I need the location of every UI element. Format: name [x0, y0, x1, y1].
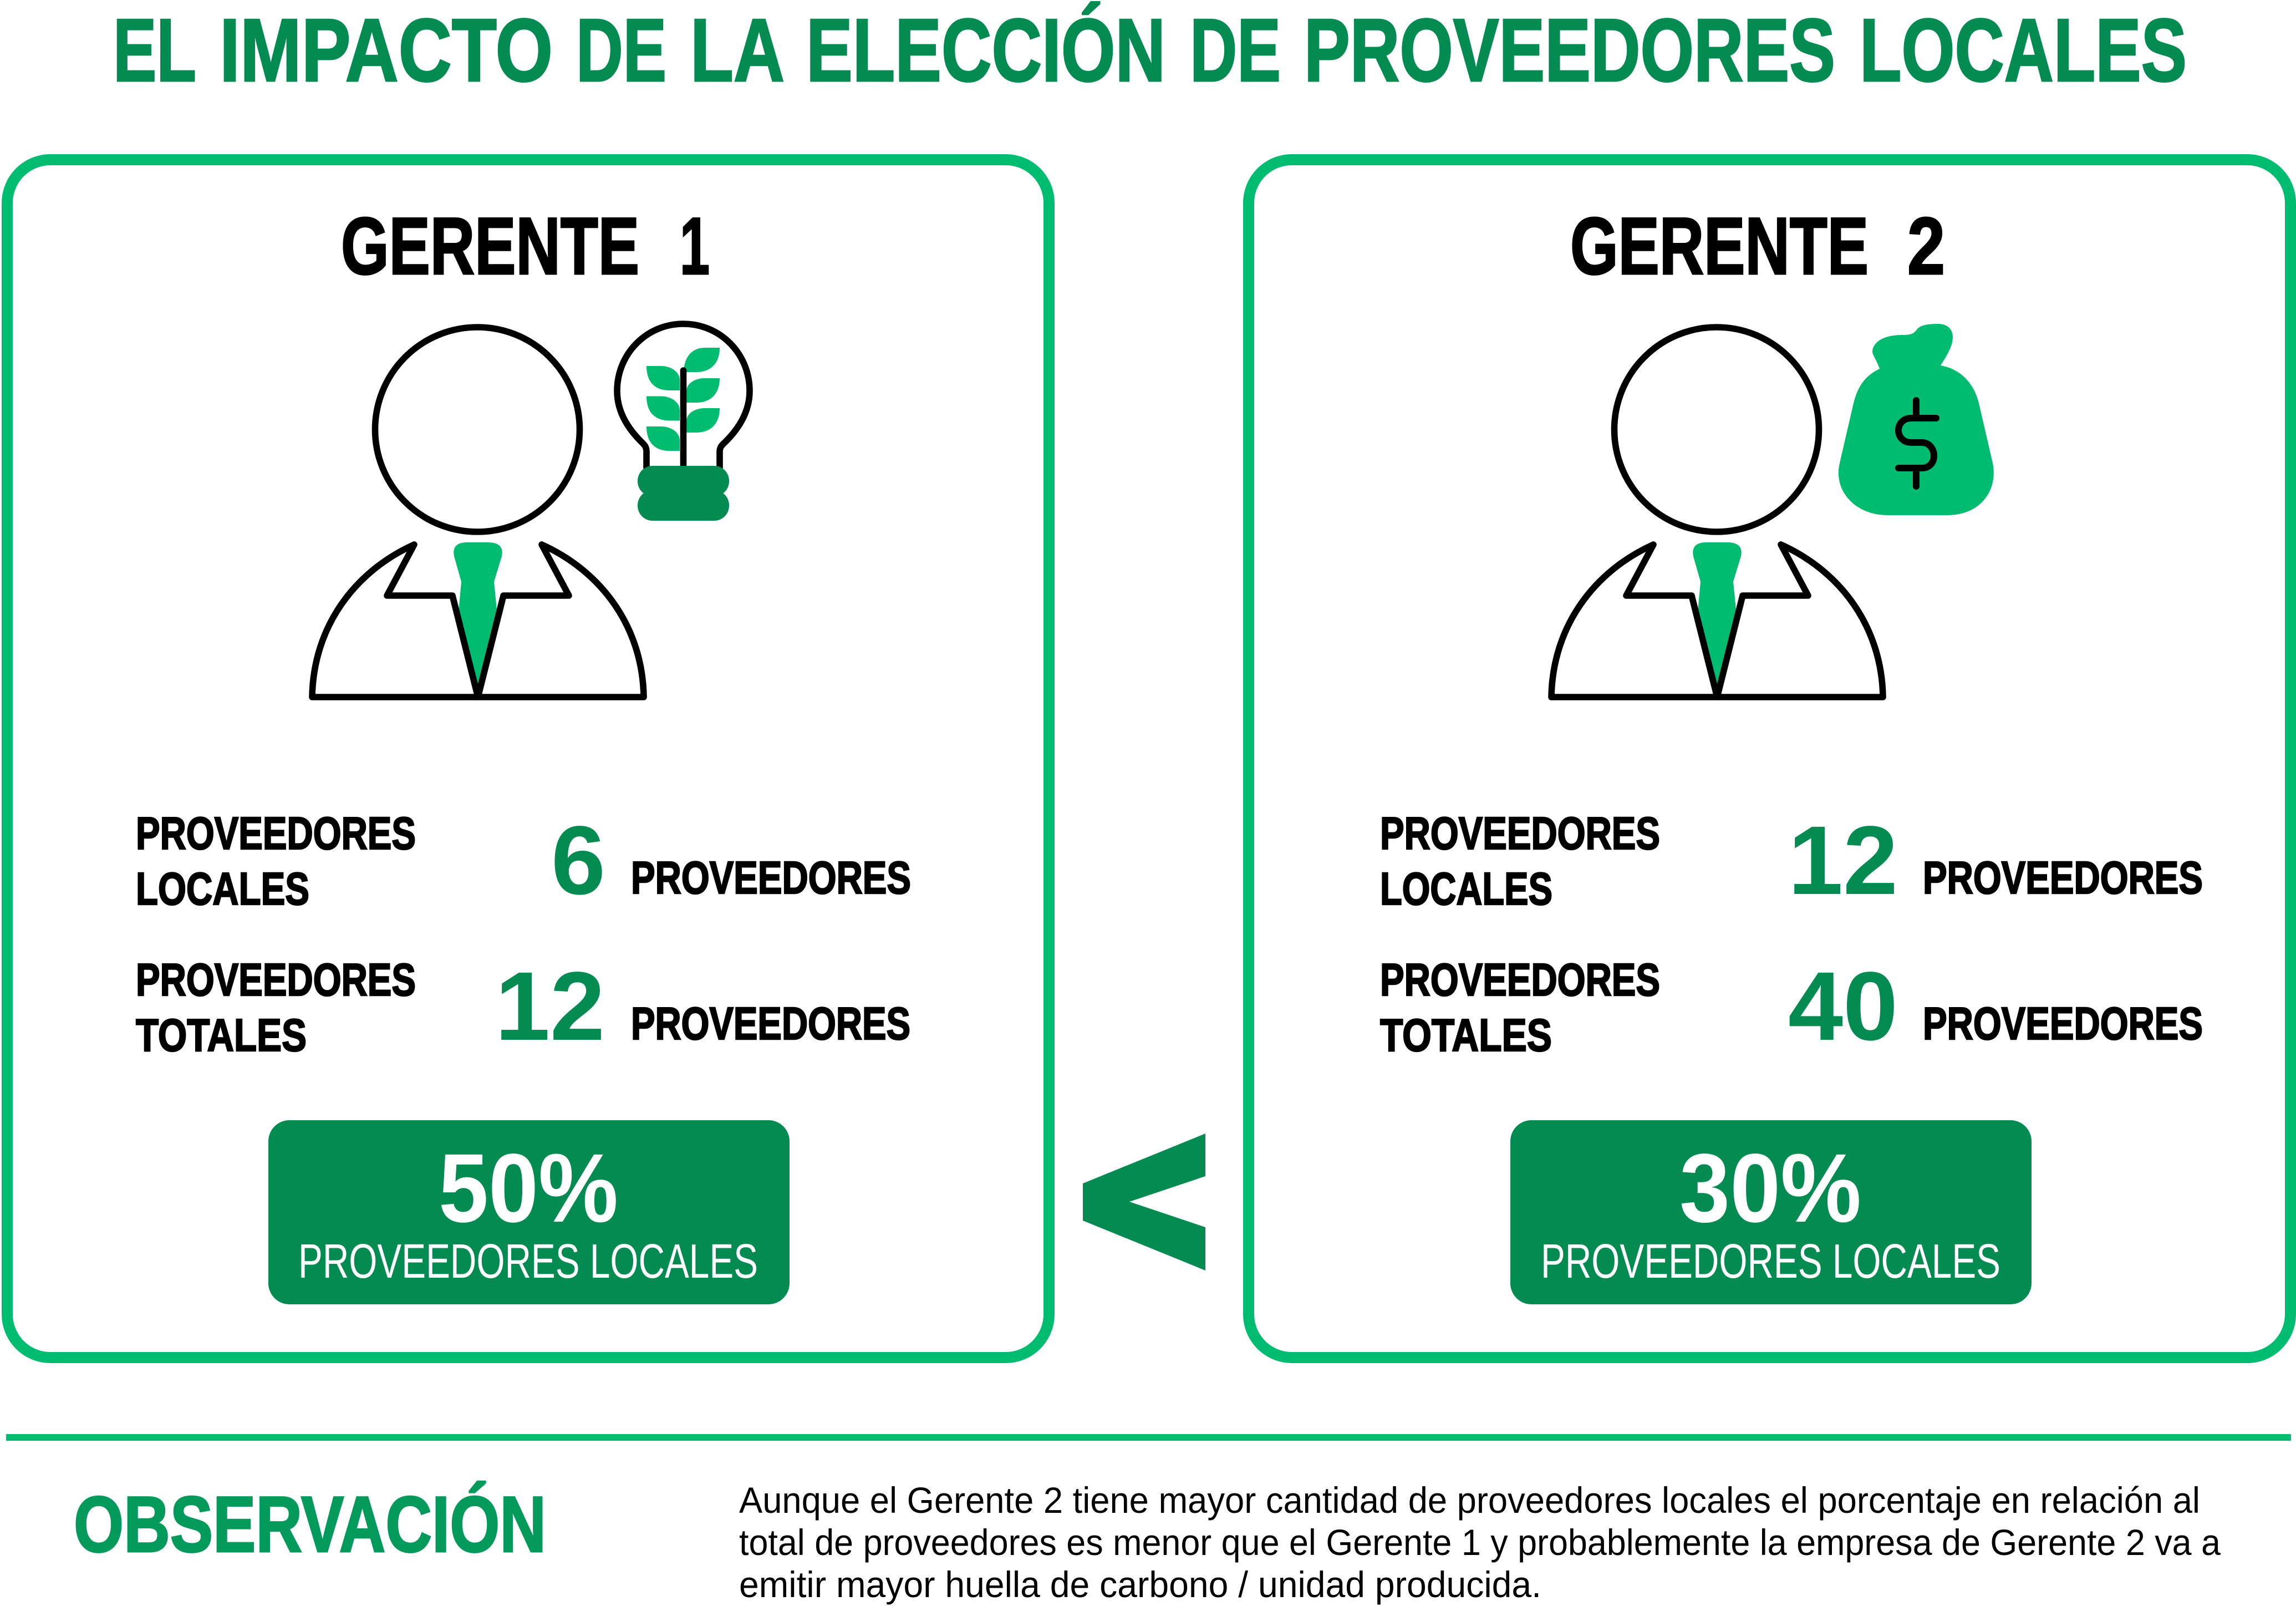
row: proveedores locales 1: PROVEEDORES	[136, 807, 416, 859]
row: proveedores locales 1: PROVEEDORES	[631, 852, 911, 903]
row: proveedores locales 2: LOCALES	[1380, 863, 1552, 914]
observation text: emitir mayor huella de carbono / unidad producida.	[739, 1564, 1541, 1605]
icon: money bag	[1839, 324, 1994, 515]
row: proveedores locales 1: LOCALES	[136, 863, 309, 914]
panel: gerente 1	[7, 160, 1049, 1358]
title: PROVEEDORES	[1304, 1, 1835, 100]
row: proveedores totales 1: PROVEEDORES	[136, 954, 416, 1005]
title: LOCALES	[1860, 1, 2187, 100]
result box 30%	[1510, 1120, 2032, 1304]
arrow: less than	[1083, 1134, 1205, 1270]
row: proveedores totales 1	[136, 952, 910, 1061]
heading text: gerente 2: GERENTE	[1570, 201, 1869, 291]
panel frame 2	[1249, 160, 2290, 1358]
title: LA	[690, 1, 785, 100]
title: IMPACTO	[220, 1, 553, 100]
icon: manager 2	[1551, 327, 1883, 697]
row: proveedores locales 2: PROVEEDORES	[1923, 852, 2203, 903]
heading text: gerente 1: 1	[680, 201, 710, 291]
row: proveedores locales 1: 6	[551, 806, 605, 915]
heading text: gerente 1: GERENTE	[341, 201, 639, 291]
title	[113, 1, 2187, 100]
title: EL	[113, 1, 196, 100]
row: proveedores totales 1: PROVEEDORES	[631, 998, 910, 1049]
row: proveedores totales 2	[1380, 952, 2203, 1061]
row: proveedores totales 1: 12	[495, 952, 605, 1061]
result box 50%	[268, 1120, 790, 1304]
result box 30%: PROVEEDORES LOCALES	[1541, 1234, 2000, 1288]
observation text	[739, 1480, 2221, 1605]
row: proveedores totales 1: TOTALES	[136, 1009, 307, 1061]
panel: gerente 2	[1249, 160, 2290, 1358]
row: proveedores totales 2: PROVEEDORES	[1380, 954, 1660, 1005]
result box 50%: 50%	[439, 1134, 618, 1243]
row: proveedores totales 2: 40	[1788, 952, 1898, 1061]
row: proveedores locales 2: PROVEEDORES	[1380, 807, 1660, 859]
title: DE	[1190, 1, 1281, 100]
row: proveedores totales 2: PROVEEDORES	[1923, 998, 2203, 1049]
icon: plant light bulb	[617, 324, 750, 521]
heading text: gerente 2: 2	[1907, 201, 1945, 291]
result box 50%: PROVEEDORES LOCALES	[298, 1234, 758, 1288]
icon: manager 1	[312, 327, 644, 697]
title: DE	[576, 1, 666, 100]
observation text: Aunque el Gerente 2 tiene mayor cantidad de proveedores locales el porcentaje en relación al	[739, 1480, 2200, 1521]
row: proveedores locales 2	[1380, 806, 2203, 915]
row: proveedores totales 2: TOTALES	[1380, 1009, 1552, 1061]
title: ELECCIÓN	[806, 1, 1165, 100]
panel frame 1	[7, 160, 1049, 1358]
observation text: total de proveedores es menor que el Gerente 1 y probablemente la empresa de Gerente 2 va a	[739, 1522, 2221, 1563]
row: proveedores locales 1	[136, 806, 911, 915]
result box 30%: 30%	[1679, 1134, 1861, 1243]
heading: observacion: OBSERVACIÓN	[74, 1481, 546, 1569]
row: proveedores locales 2: 12	[1788, 806, 1898, 915]
